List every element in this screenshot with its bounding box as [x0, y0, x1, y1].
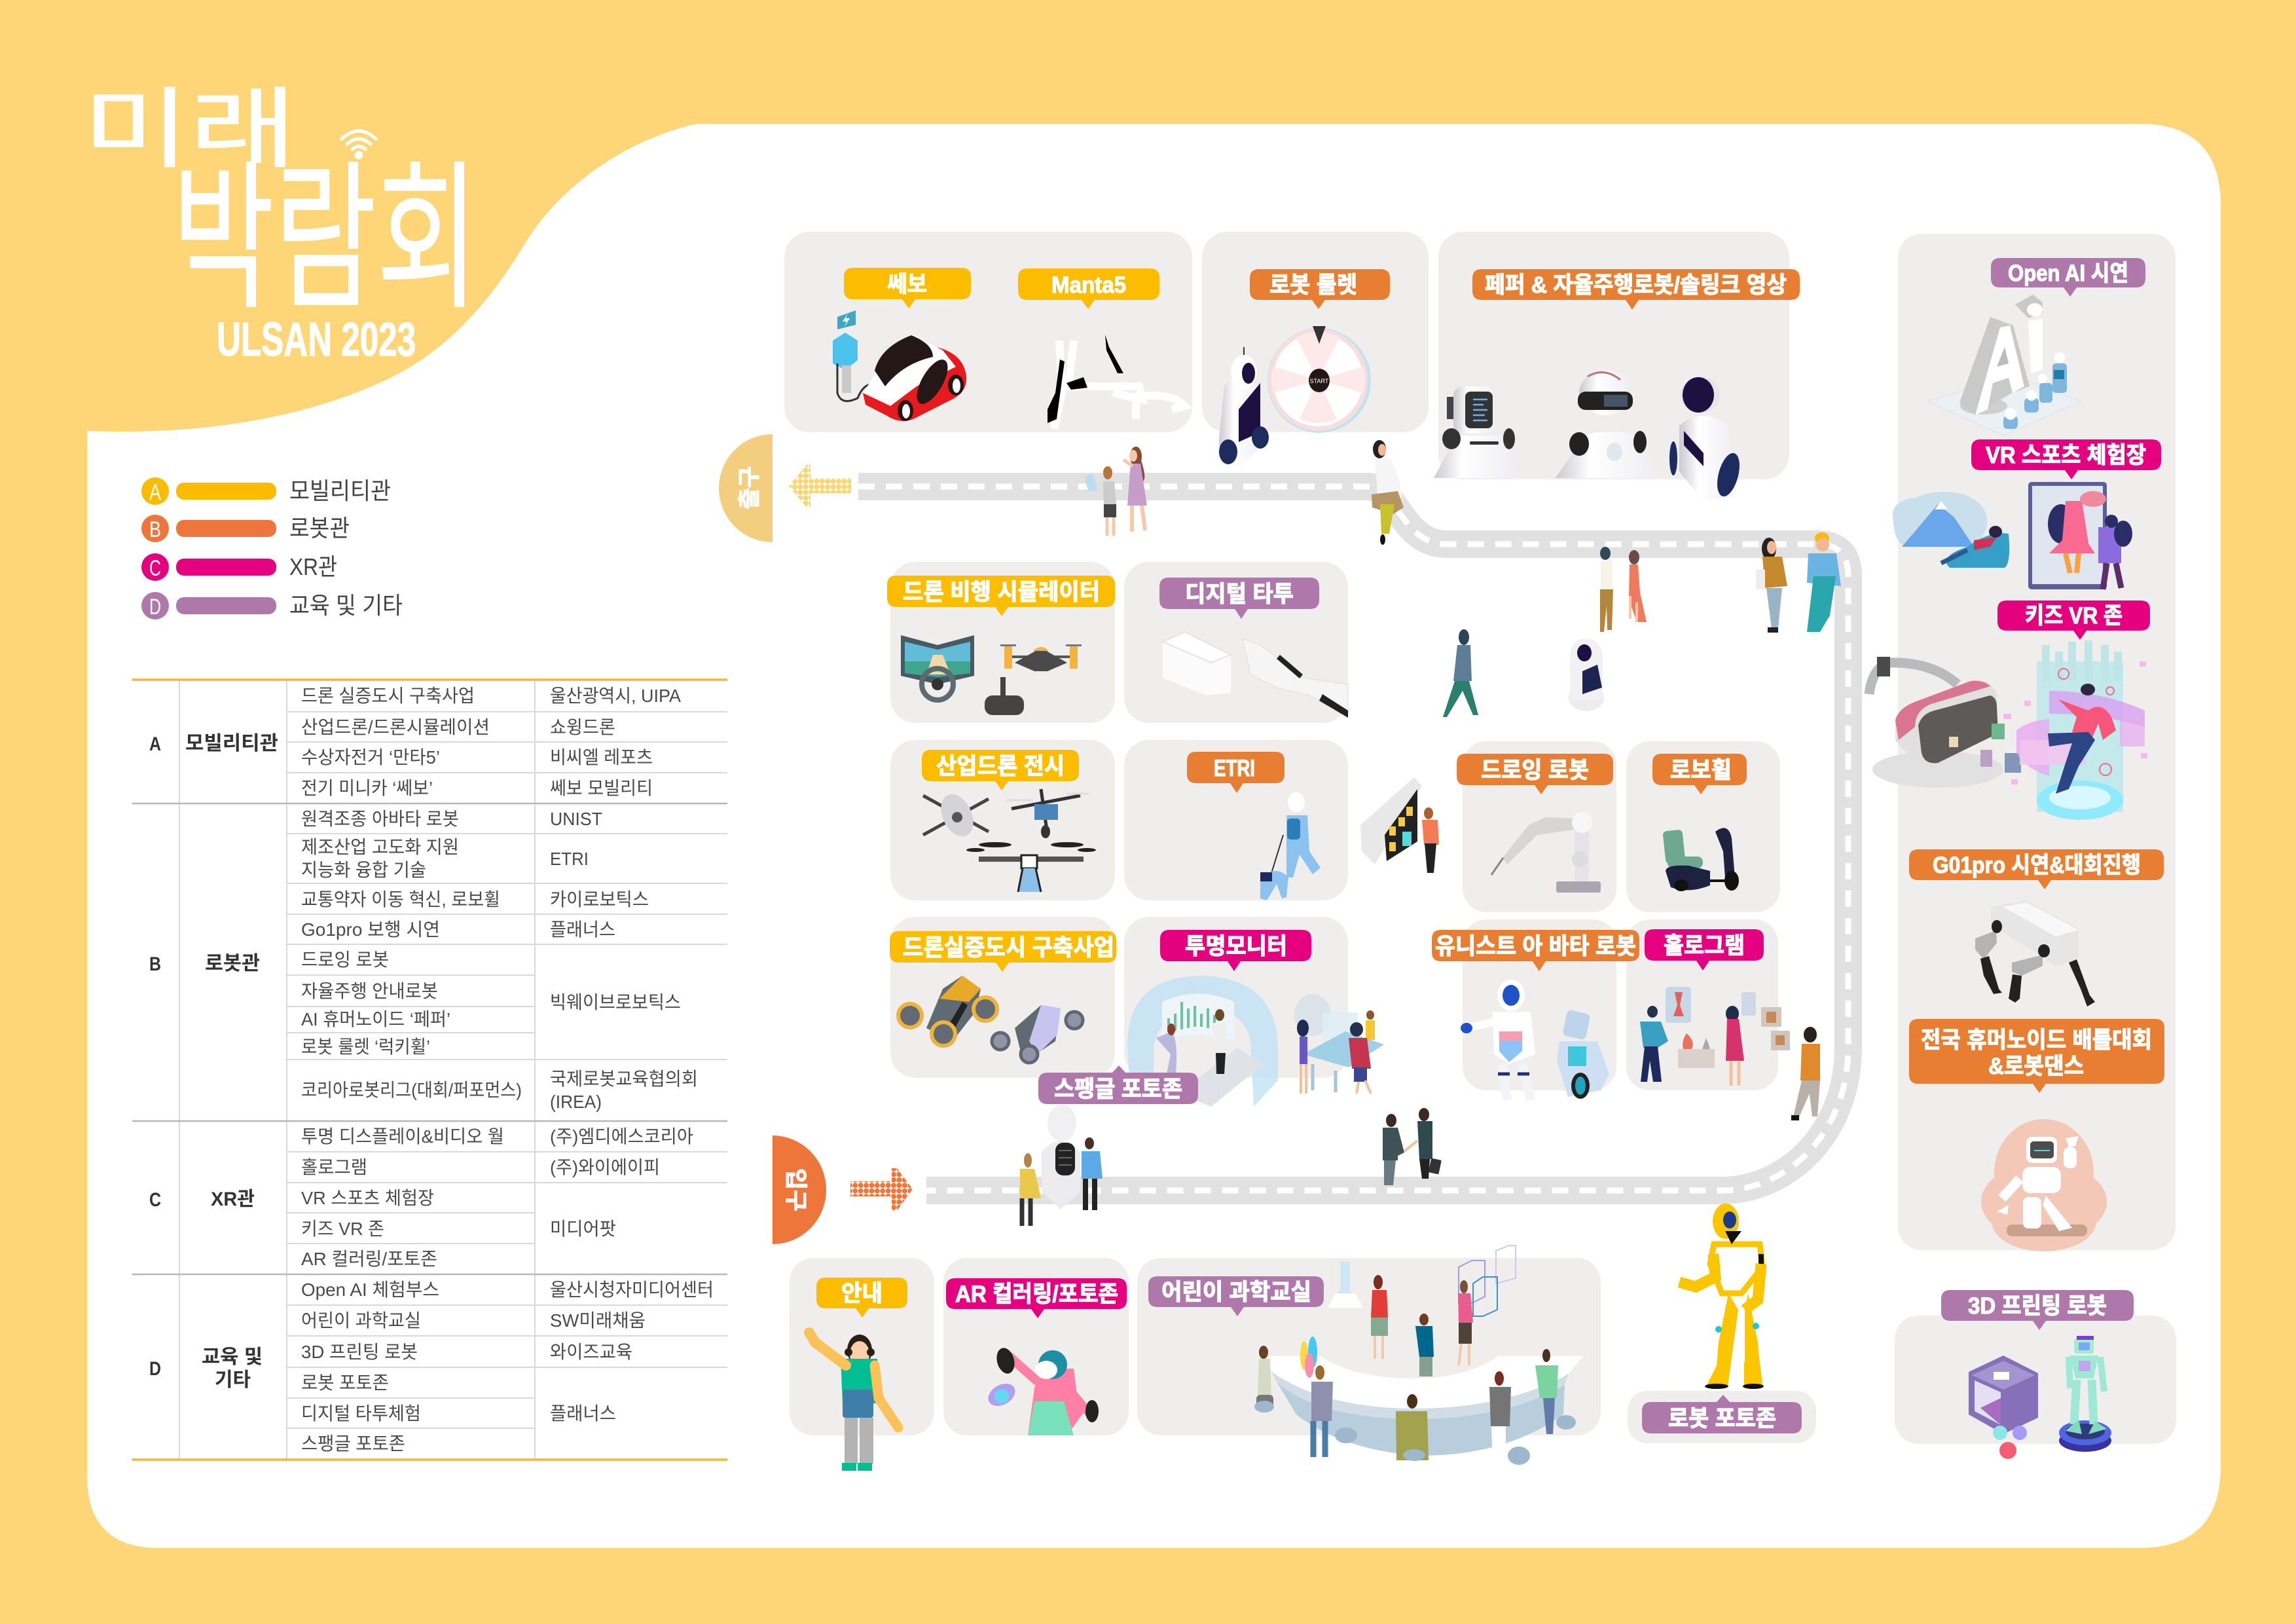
- table: exhibitors: 플래너스: [550, 919, 615, 940]
- label: 드론 비행 시뮬레이터: [887, 576, 1115, 616]
- illustration: air taxis: [898, 976, 1083, 1063]
- label: VR 스포츠 체험장: VR 스포츠 체험장: [1986, 443, 2146, 468]
- label: 드론실증도시 구축사업: 드론실증도시 구축사업: [903, 935, 1114, 961]
- illustration: guide woman: [809, 1333, 898, 1471]
- panel: 산업드론 전시: [890, 740, 1115, 900]
- illustration: VR sports mountain and beanbag: [1893, 492, 2009, 568]
- table: exhibitors: 어린이 과학교실: [301, 1310, 421, 1331]
- label: 로봇 룰렛: [1250, 269, 1390, 309]
- table: exhibitors: 산업드론/드론시뮬레이션: [301, 717, 490, 737]
- entrance tab: 입구: [773, 1135, 826, 1244]
- label: 유니스트 아바타 로봇: [1432, 930, 1639, 971]
- label: 디지털 타투: [1159, 578, 1319, 619]
- table: exhibitors: 쇼윙드론: [550, 717, 615, 737]
- label: AR 컬러링/포토존: AR 컬러링/포토존: [955, 1282, 1118, 1307]
- panel: 3D 프린팅 로봇: [1895, 1316, 2176, 1444]
- table: exhibitors: 교육 및: [202, 1346, 263, 1368]
- legend: 교육 및 기타: [289, 592, 403, 619]
- legend: [141, 477, 403, 619]
- illustration: Pepper and autonomous robots: [1434, 371, 1743, 500]
- label: 로봇 포토존: 로봇 포토존: [1668, 1406, 1776, 1431]
- exit tab: 출구: 출구: [737, 466, 762, 509]
- subtitle: ULSAN 2023: ULSAN 2023: [217, 314, 416, 366]
- panel: 디지털 타투: [1124, 562, 1348, 723]
- table: exhibitors: 국제로봇교육협의회: [550, 1069, 698, 1089]
- label: Manta5: Manta5: [1051, 272, 1126, 298]
- label: 드로잉 로봇: 드로잉 로봇: [1481, 758, 1589, 783]
- label: 스팽글 포토존: 스팽글 포토존: [1054, 1077, 1182, 1102]
- label: Open AI 시연: Open AI 시연: [2008, 261, 2128, 286]
- person: man in yellow hat: [1807, 532, 1841, 632]
- illustration: VR sports tablet with women: [2028, 482, 2132, 589]
- table: exhibitors: C: [149, 1189, 161, 1211]
- label: 안내: 안내: [841, 1281, 883, 1306]
- illustration: transparent monitor dome: [1127, 976, 1278, 1107]
- table: exhibitors: 플래너스: [550, 1403, 616, 1424]
- legend: 모빌리티관: [289, 477, 391, 504]
- person: couple on road: [1600, 547, 1647, 632]
- panel: AR 컬러링: [943, 1258, 1129, 1435]
- table: exhibitors: 로봇 포토존: [301, 1373, 389, 1393]
- table: exhibitors: XR관: [211, 1189, 255, 1210]
- label: 홀로그램: [1645, 929, 1764, 970]
- panel: 홀로그램: [1626, 919, 1778, 1090]
- table: exhibitors: AI 휴머노이드 ‘페퍼’: [301, 1009, 450, 1029]
- table: exhibitors: 자율주행 안내로봇: [301, 981, 438, 1001]
- panel: 로봇 포토존: [1628, 1391, 1816, 1443]
- label: 투명모니터: 투명모니터: [1185, 934, 1287, 959]
- panel: 로봇 룰렛: [1202, 232, 1429, 432]
- label: 키즈 VR 존: [1997, 600, 2150, 640]
- legend: XR관: [289, 553, 337, 580]
- label: 로봇 룰렛: 로봇 룰렛: [1269, 272, 1357, 298]
- label: 페퍼&자율주행로봇/솔링크 영상: [1472, 269, 1800, 310]
- label: 로봇 포토존: [1642, 1395, 1802, 1433]
- label: ETRI: ETRI: [1214, 756, 1255, 781]
- label: 3D 프린팅 로봇: 3D 프린팅 로봇: [1968, 1293, 2107, 1319]
- table: exhibitors: B: [149, 953, 161, 975]
- table: exhibitors: [132, 680, 727, 1460]
- exit tab: 출구: [719, 434, 773, 542]
- table: exhibitors: UNIST: [550, 809, 602, 829]
- illustration: 쎄보 car and charger: [833, 310, 966, 421]
- table: exhibitors: VR 스포츠 체험장: [301, 1188, 434, 1208]
- person: woman and child at exit road: [1084, 447, 1147, 536]
- label: 드로잉 로봇: [1457, 754, 1613, 794]
- label: 3D 프린팅 로봇: [1941, 1290, 2134, 1330]
- label: 쎄보: [844, 268, 971, 308]
- legend: A: [149, 480, 161, 505]
- title: 미래 박람회: [82, 81, 479, 328]
- table: exhibitors: 드로잉 로봇: [301, 950, 389, 970]
- table: exhibitors: Open AI 체험부스: [301, 1280, 439, 1300]
- panel: 드로잉 로봇: [1463, 741, 1616, 912]
- label: 로보휠: [1652, 754, 1747, 794]
- illustration: digital tattoo device and robot hand: [1163, 632, 1348, 718]
- label: 페퍼&자율주행로봇/솔링크 영상: 페퍼 & 자율주행로봇/솔링크 영상: [1485, 272, 1787, 298]
- illustration: 로보휠 mobility chair: [1662, 828, 1739, 891]
- table: exhibitors: D: [149, 1358, 161, 1380]
- label: 유니스트 아바타 로봇: 유니스트 아 바타 로봇: [1435, 934, 1636, 959]
- label: 쎄보: 쎄보: [887, 272, 927, 297]
- panel: right column: [1898, 234, 2176, 1250]
- label: G01pro 시연&대회진행: G01pro 시연&대회진행: [1933, 853, 2141, 878]
- label: 디지털 타투: 디지털 타투: [1185, 581, 1294, 607]
- table: exhibitors: Go1pro 보행 시연: [301, 919, 440, 940]
- label: AR 컬러링/포토존: [946, 1278, 1127, 1318]
- people: handshake: [1383, 1108, 1442, 1185]
- table: exhibitors: 드론 실증도시 구축사업: [301, 686, 475, 706]
- person: woman in yellow trousers: [1372, 440, 1404, 545]
- illustration: kiosk robot with visitors: [1020, 1105, 1102, 1226]
- table: exhibitors: 카이로보틱스: [550, 889, 649, 910]
- table: exhibitors: 키즈 VR 존: [301, 1219, 384, 1239]
- illustration: VR headset: [1869, 657, 2021, 788]
- road: [858, 487, 1848, 1190]
- legend: C: [149, 556, 161, 581]
- table: exhibitors: (주)와이에이피: [550, 1157, 660, 1177]
- table: exhibitors: 원격조종 아바타 로봇: [301, 809, 459, 829]
- label: Manta5: [1018, 268, 1159, 309]
- entrance tab: 입구: 입구: [783, 1168, 808, 1211]
- table: exhibitors: 지능화 융합 기술: [301, 860, 426, 880]
- illustration: dancing humanoid robot: [1981, 1119, 2107, 1251]
- illustration: UNIST avatar robot: [1461, 980, 1609, 1100]
- panel: 드론 비행 시뮬레이터: [890, 562, 1115, 723]
- table: exhibitors: 모빌리티관: [185, 733, 278, 754]
- label: 산업드론 전시: [922, 750, 1079, 790]
- person: walking woman: [1443, 629, 1478, 717]
- person: woman photographing: [1756, 538, 1787, 633]
- illustration: yellow humanoid robot: [1679, 1204, 1764, 1389]
- panel: ETRI: [1124, 740, 1348, 900]
- table: exhibitors: A: [149, 733, 161, 755]
- label: 어린이 과학교실: [1148, 1276, 1324, 1316]
- panel: 투명모니터: [1124, 917, 1348, 1078]
- illustration: touch table group: [1294, 994, 1384, 1094]
- legend: 로봇관: [289, 515, 350, 542]
- label: 투명모니터: [1160, 930, 1311, 971]
- panel: 유니스트 아바타 로봇: [1463, 919, 1616, 1090]
- label: ETRI: [1187, 752, 1285, 793]
- arrow: exit direction: [789, 465, 851, 507]
- illustration: Open AI letters with robots: [1927, 295, 2081, 435]
- legend: D: [149, 595, 161, 619]
- label: 안내: [816, 1278, 907, 1318]
- table: exhibitors: 홀로그램: [301, 1157, 367, 1177]
- illustration: drone simulator: [901, 635, 1082, 715]
- label: 전국 휴머노이드 배틀대회 &로봇댄스: 전국 휴머노이드 배틀대회: [1921, 1027, 2152, 1053]
- table: exhibitors: (IREA): [550, 1092, 602, 1112]
- table: exhibitors: 3D 프린팅 로봇: [301, 1342, 418, 1362]
- illustration: ETRI robot and robot dog: [1260, 792, 1321, 900]
- table: exhibitors: 스팽글 포토존: [301, 1433, 405, 1454]
- table: exhibitors: 교통약자 이동 혁신, 로보휠: [301, 889, 500, 910]
- table: exhibitors: 쎄보 모빌리티: [550, 778, 653, 798]
- illustration: Manta5 hydrofoil bike: [1048, 335, 1185, 429]
- table: exhibitors: 수상자전거 ‘만타5’: [301, 747, 440, 767]
- panel: 안내: [790, 1258, 934, 1435]
- table: exhibitors: 전기 미니카 ‘쎄보’: [301, 778, 433, 798]
- table: exhibitors: 제조산업 고도화 지원: [301, 837, 459, 857]
- table: exhibitors: 와이즈교육: [550, 1342, 632, 1362]
- table: exhibitors: 기타: [215, 1369, 251, 1391]
- illustration: 3D printed robot: [2059, 1336, 2111, 1452]
- illustration: industrial drones: [923, 789, 1096, 892]
- table: exhibitors: 로봇관: [205, 953, 260, 974]
- panel: 쎄보 / Manta5: [784, 232, 1192, 432]
- title: 미래 박람회: 박람회: [172, 149, 479, 328]
- illustration: guide robot: [1569, 638, 1604, 711]
- table: exhibitors: AR 컬러링/포토존: [301, 1249, 437, 1269]
- table: exhibitors: 비씨엘 레포츠: [550, 747, 653, 767]
- table: exhibitors: (주)엠디에스코리아: [550, 1126, 693, 1147]
- table: exhibitors: 로봇 룰렛 ‘럭키휠’: [301, 1037, 430, 1057]
- person: woman with backpack: [1791, 1027, 1820, 1120]
- illustration: kids VR hologram: [2003, 640, 2147, 820]
- arrow: entrance direction: [850, 1168, 913, 1211]
- label: VR 스포츠 체험장: [1971, 439, 2161, 479]
- label: 산업드론 전시: 산업드론 전시: [936, 754, 1065, 779]
- label: 키즈 VR 존: 키즈 VR 존: [2025, 603, 2123, 629]
- table: exhibitors: 코리아로봇리그(대회/퍼포먼스): [301, 1080, 522, 1100]
- panel: 드론실증도시: [890, 917, 1115, 1078]
- panel: 페퍼 영상: [1438, 232, 1789, 479]
- label: 전국 휴머노이드 배틀대회 &로봇댄스: [1909, 1019, 2164, 1093]
- table: exhibitors: 빅웨이브로보틱스: [550, 992, 681, 1012]
- illustration: 룰렛 wheel with robot: [1219, 326, 1371, 466]
- panel: 어린이 과학교실: [1137, 1258, 1601, 1435]
- illustration: 3D printer: [1969, 1356, 2038, 1459]
- illustration: science classroom: [1254, 1246, 1583, 1467]
- table: exhibitors: ETRI: [550, 849, 589, 869]
- illustration: hologram visitors: [1640, 987, 1790, 1086]
- label: 어린이 과학교실: 어린이 과학교실: [1161, 1280, 1311, 1305]
- illustration: smartphone board with man: [1360, 777, 1439, 873]
- illustration: drawing robot arm: [1491, 812, 1601, 893]
- label: 홀로그램: 홀로그램: [1664, 933, 1745, 959]
- panel: 로보휠: [1626, 741, 1780, 912]
- label: Open AI 시연: [1991, 258, 2145, 297]
- table: exhibitors: 울산시청자미디어센터: [550, 1280, 714, 1300]
- label: 로보휠: 로보휠: [1670, 758, 1732, 783]
- illustration: AR colouring girl: [984, 1346, 1099, 1435]
- label: 스팽글 포토존: [1038, 1065, 1198, 1104]
- table: exhibitors: 미디어팟: [550, 1219, 616, 1239]
- illustration: Go1 robot dog: [1975, 900, 2095, 1006]
- label: 드론 비행 시뮬레이터: 드론 비행 시뮬레이터: [903, 580, 1100, 605]
- table: exhibitors: 투명 디스플레이&비디오 월: [301, 1126, 504, 1147]
- legend: B: [149, 517, 161, 542]
- table: exhibitors: 디지털 타투체험: [301, 1403, 421, 1424]
- icon: wifi signal: [342, 131, 376, 158]
- label: 드론실증도시 구축사업: [890, 931, 1116, 972]
- table: exhibitors: 울산광역시, UIPA: [550, 686, 681, 706]
- title: 미래 박람회: 미래: [82, 81, 297, 179]
- label: 전국 휴머노이드 배틀대회 &로봇댄스: &로봇댄스: [1988, 1054, 2084, 1079]
- table: exhibitors: SW미래채움: [550, 1310, 646, 1331]
- label: G01pro 시연&대회진행: [1909, 849, 2164, 889]
- illustration: 룰렛 wheel with robot: START: [1310, 378, 1329, 384]
